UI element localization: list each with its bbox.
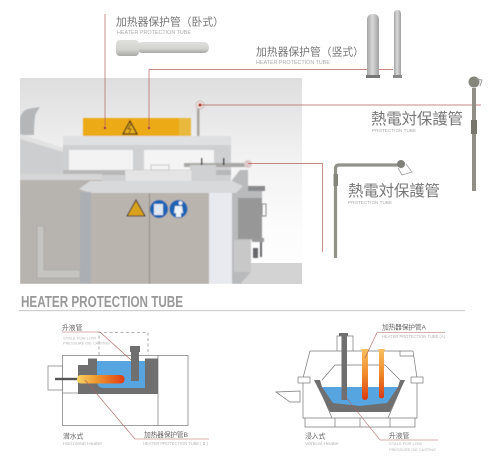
- pipe and tray on top: [124, 158, 252, 181]
- labels: Horizontal Heater: [63, 441, 103, 446]
- labels: 浸入式: [305, 432, 326, 440]
- leader lines: [104, 14, 481, 252]
- diagram: horizontal heater: [48, 323, 209, 446]
- icon: thermocouple lower: [334, 160, 412, 258]
- cabinet: [79, 181, 243, 284]
- label: vertical heater tube: HEATER PROTECTION TUBE: [256, 60, 330, 66]
- labels: STALK FOR LOW: [389, 441, 422, 446]
- labels: [305, 322, 446, 452]
- labels: 潜水式: [63, 432, 84, 440]
- labels: Vertical Heater: [305, 441, 340, 446]
- labels: PRESSURE DIE CASTING: [389, 447, 436, 452]
- flanges: [298, 377, 423, 383]
- left roof panel: [20, 139, 64, 174]
- labels: 加热器保护管A: [382, 322, 426, 332]
- label: thermocouple tube lower: PROTECTION TUBE: [348, 200, 392, 206]
- icon: horizontal heater tube: [116, 40, 209, 56]
- icon: vertical heater tubes: [366, 10, 402, 78]
- upper frame with windows: [63, 136, 231, 181]
- labels: HEATER PROTECTION TUBE ( B ): [143, 441, 209, 446]
- diagram: vertical heater: [276, 322, 446, 452]
- warning and safety signs: [127, 200, 188, 218]
- hood on left of the furnace: [20, 107, 40, 135]
- furnace wall: [78, 358, 158, 394]
- section heading: HEATER PROTECTION TUBE: [21, 294, 183, 311]
- heater rod: [55, 378, 78, 380]
- molten metal: [97, 361, 145, 388]
- section rule: [19, 310, 465, 311]
- labels: [62, 323, 209, 446]
- panel: furnace photo: [20, 78, 302, 284]
- label: vertical heater tube: 加热器保护管（竖式）: [256, 44, 364, 58]
- labels: PRESSURE DIE CASTING: [63, 340, 110, 346]
- heater tubes A: [361, 349, 385, 400]
- labels: 升液管: [62, 323, 83, 332]
- sensor mast: [196, 101, 204, 136]
- label: horizontal heater tube: 加热器保护管（卧式）: [116, 14, 224, 28]
- stalk tube: [339, 333, 348, 400]
- side unit: [232, 170, 266, 284]
- label: vertical heater tube: [256, 44, 364, 66]
- label: horizontal heater tube: [116, 14, 224, 36]
- label: thermocouple tube upper: 熱電対保護管: [371, 110, 463, 128]
- labels: STALK FOR LOW: [63, 336, 96, 340]
- heater flame: [77, 375, 124, 384]
- label: thermocouple tube lower: 熱電対保護管: [348, 182, 440, 200]
- label: thermocouple tube upper: PROTECTION TUBE: [372, 128, 416, 134]
- icon: thermocouple upper: [468, 76, 482, 191]
- left lower body: [20, 174, 102, 284]
- labels: HEATER PROTECTION TUBE (A): [382, 334, 446, 339]
- labels: 升液管: [389, 431, 410, 440]
- labels: 加热器保护管B: [144, 430, 188, 439]
- crucible: [314, 380, 405, 412]
- yellow heater box: [83, 118, 191, 136]
- label: horizontal heater tube: HEATER PROTECTION TUBE: [117, 30, 191, 36]
- stalk tube: [130, 346, 140, 381]
